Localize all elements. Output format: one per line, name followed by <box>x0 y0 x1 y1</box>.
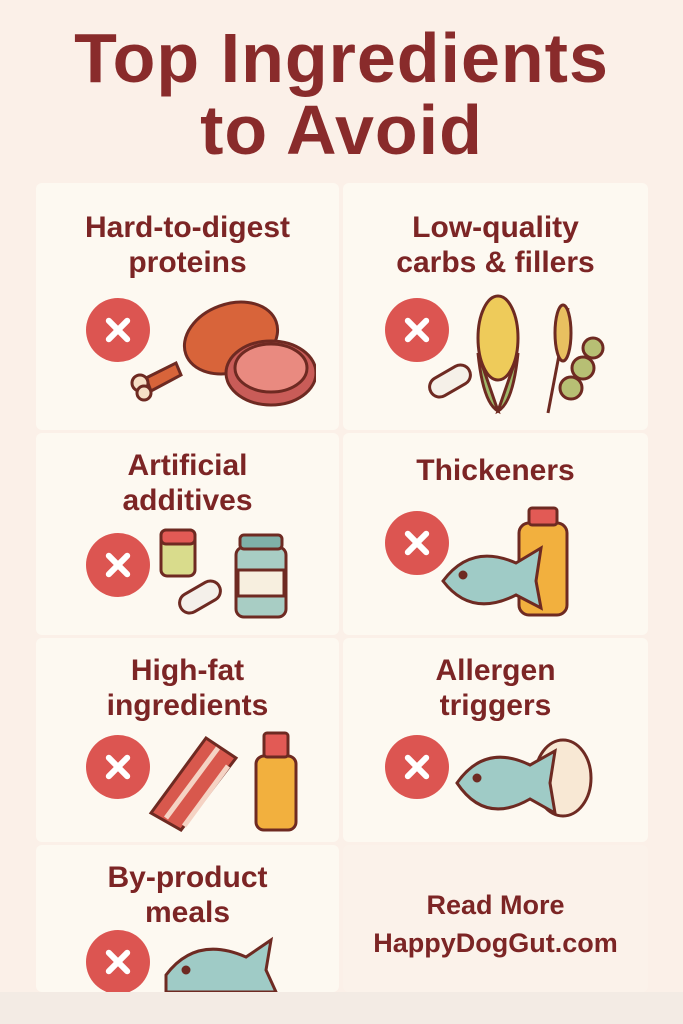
icon: x <box>385 511 449 575</box>
icon: fish and bottle <box>441 506 568 616</box>
label: Hard-to-digest <box>85 211 290 244</box>
label: additives <box>122 484 253 517</box>
icon: x <box>385 298 449 362</box>
panel: high-fat ingredients <box>36 638 339 842</box>
bottom strip <box>0 992 683 1024</box>
icon: pills and jar <box>160 528 288 618</box>
label: By-product <box>108 861 268 894</box>
panel: thickeners <box>343 433 648 635</box>
label <box>85 211 290 279</box>
panel: artificial additives <box>36 433 339 635</box>
icon: chicken and steak <box>130 300 316 406</box>
panel: low-quality carbs <box>343 183 648 430</box>
label: Thickeners <box>416 454 575 487</box>
panel: read more <box>343 845 648 992</box>
title: Top Ingredients <box>74 19 609 97</box>
panel: by-product meals <box>36 845 339 992</box>
label <box>107 654 268 722</box>
label: proteins <box>128 246 247 279</box>
label: Artificial <box>127 449 248 482</box>
icon: x <box>86 533 150 597</box>
icon: x <box>86 735 150 799</box>
label <box>108 861 268 929</box>
label: Low-quality <box>412 211 579 244</box>
label: triggers <box>440 689 551 722</box>
label: High-fat <box>131 654 244 687</box>
label: carbs & fillers <box>396 246 595 279</box>
panel: hard-to-digest proteins <box>36 183 339 430</box>
icon: fish <box>164 936 278 992</box>
icon: x <box>385 735 449 799</box>
label: Allergen <box>435 654 556 687</box>
label: meals <box>145 896 230 929</box>
label: ingredients <box>107 689 268 722</box>
icon: fish and egg <box>455 738 592 818</box>
icon: corn, wheat, pill <box>428 294 604 414</box>
cta text <box>373 890 618 958</box>
title <box>74 19 609 169</box>
cta text: Read More <box>426 890 565 920</box>
label <box>396 211 595 279</box>
title: to Avoid <box>200 91 483 169</box>
panel: allergen triggers <box>343 638 648 842</box>
icon: x <box>86 298 150 362</box>
icon: x <box>86 930 150 994</box>
label <box>435 654 556 722</box>
cta text: HappyDogGut.com <box>373 928 618 958</box>
icon: bacon and bottle <box>148 732 298 832</box>
label <box>122 449 253 517</box>
